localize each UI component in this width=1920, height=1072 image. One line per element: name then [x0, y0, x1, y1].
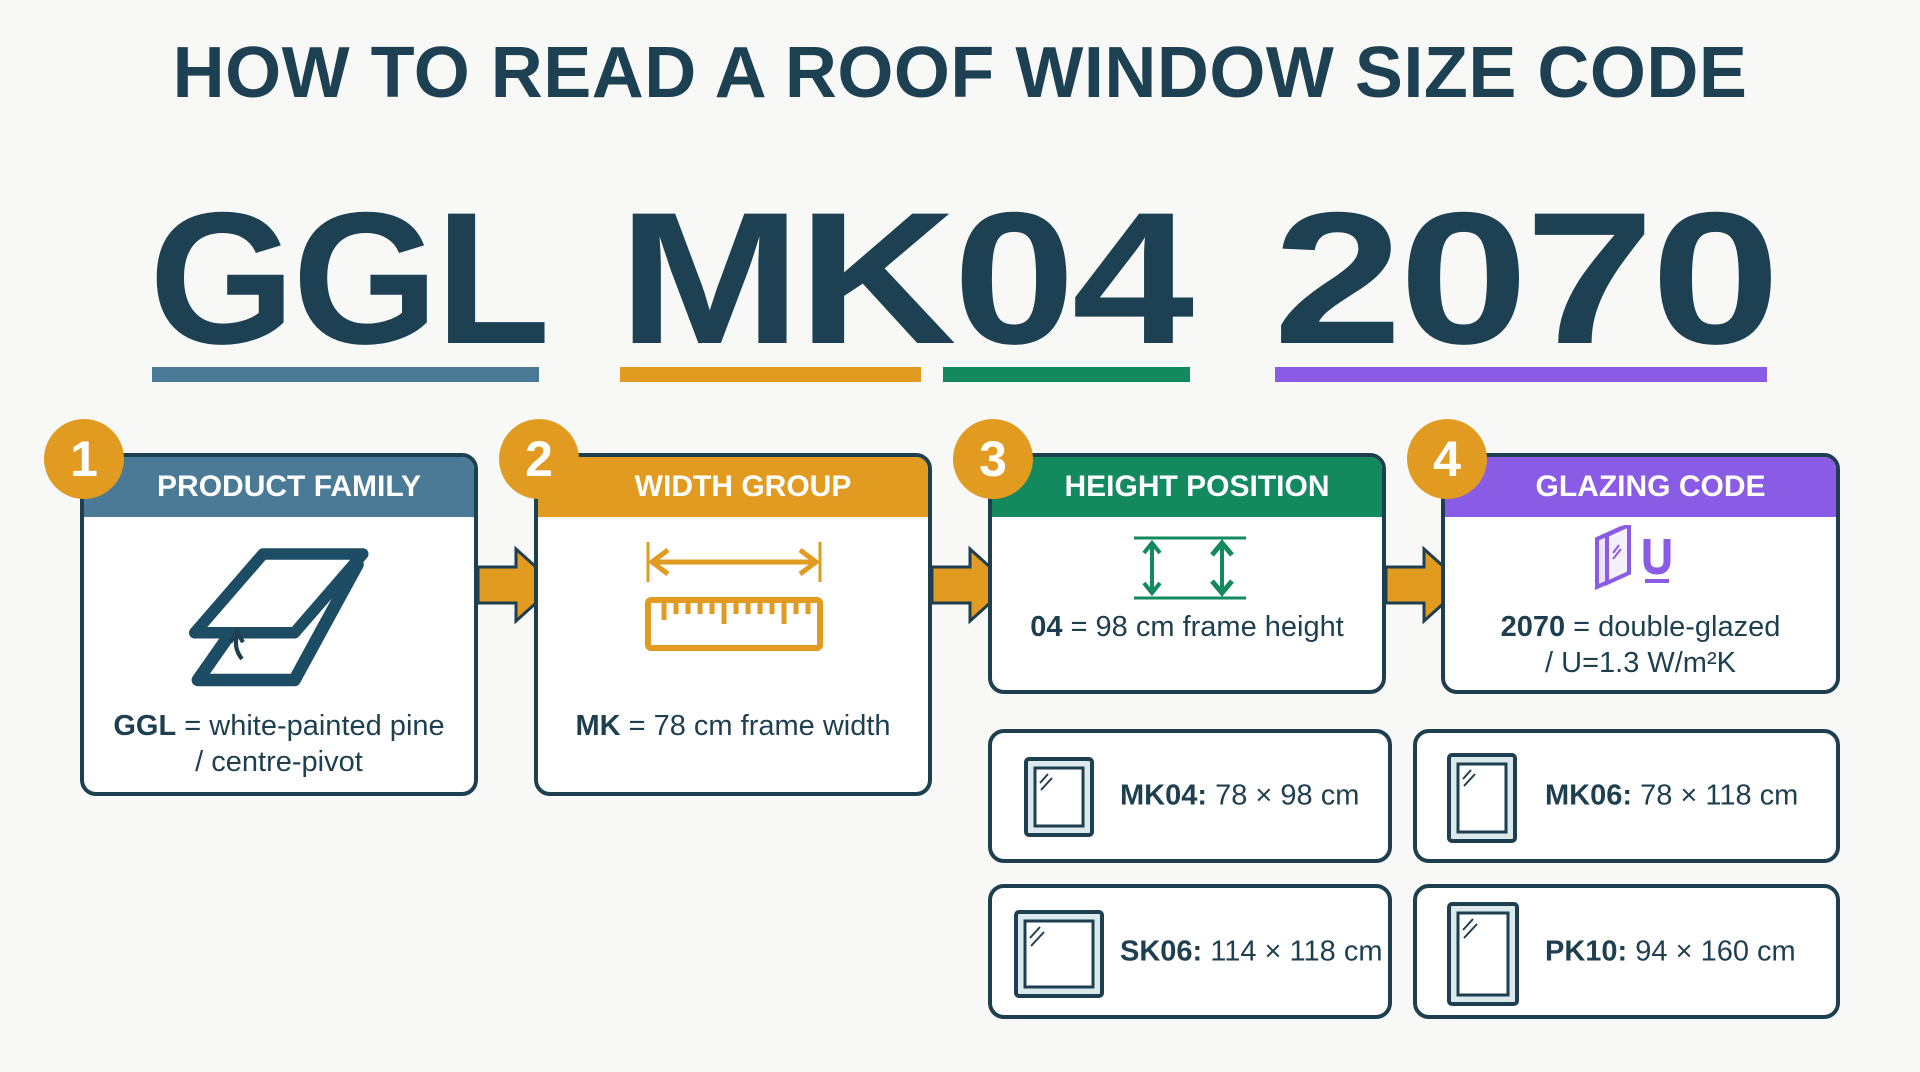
icon: glass panes + U — [1595, 525, 1670, 590]
arrow 3-4 — [1386, 546, 1441, 624]
header — [992, 457, 1382, 517]
icon: window — [1024, 757, 1094, 837]
icon: pivot window — [189, 548, 368, 686]
badge 3 — [953, 419, 1033, 499]
badge 1: 1 — [70, 431, 98, 487]
icon: window — [1014, 910, 1104, 998]
card: SK06 — [988, 884, 1392, 1019]
badge 1 — [44, 419, 124, 499]
header — [1445, 457, 1836, 517]
code: 2070: 2070 — [1273, 173, 1777, 383]
header: WIDTH GROUP — [635, 470, 851, 503]
underline: GGL — [152, 367, 539, 382]
label: MK06: 78 × 118 cm — [1545, 780, 1798, 812]
card: PK10 — [1413, 884, 1840, 1019]
label: MK04: 78 × 98 cm — [1120, 780, 1359, 812]
icon: window — [1447, 753, 1517, 843]
description: GGL = white-painted pine — [113, 710, 445, 742]
title: HOW TO READ A ROOF WINDOW SIZE CODE — [173, 33, 1747, 113]
description: MK = 78 cm frame width — [575, 710, 891, 742]
card: MK06 — [1413, 729, 1840, 863]
panel: height position — [988, 453, 1386, 694]
underline: MK — [620, 367, 921, 382]
arrow 1-2 — [478, 546, 534, 624]
badge 2 — [499, 419, 579, 499]
description: 04 = 98 cm frame height — [1030, 611, 1344, 643]
description: 2070 = double-glazed — [1501, 611, 1780, 643]
description — [113, 710, 445, 778]
description: / centre-pivot — [195, 746, 363, 778]
badge 2: 2 — [525, 431, 553, 487]
panel: product family — [80, 453, 478, 796]
header: GLAZING CODE — [1536, 470, 1766, 503]
badge 3: 3 — [979, 431, 1007, 487]
header — [538, 457, 928, 517]
code: GGL: GGL — [149, 173, 547, 383]
description: / U=1.3 W/m²K — [1545, 647, 1736, 679]
label: PK10: 94 × 160 cm — [1545, 935, 1796, 967]
badge 4: 4 — [1433, 431, 1461, 487]
panel: glazing code — [1441, 453, 1840, 694]
underline: 2070 — [1275, 367, 1767, 382]
code: MK04: MK04 — [618, 173, 1191, 383]
icon: height arrows — [1134, 536, 1246, 600]
description — [1501, 611, 1780, 679]
arrow 2-3 — [932, 546, 988, 624]
card: MK04 — [988, 729, 1392, 863]
label: SK06: 114 × 118 cm — [1120, 935, 1382, 967]
badge 4 — [1407, 419, 1487, 499]
header — [84, 457, 474, 517]
icon: ruler — [645, 542, 823, 651]
underline: 04 — [943, 367, 1190, 382]
header: PRODUCT FAMILY — [157, 470, 421, 503]
panel: width group — [534, 453, 932, 796]
icon: window — [1447, 902, 1519, 1006]
header: HEIGHT POSITION — [1064, 470, 1330, 503]
